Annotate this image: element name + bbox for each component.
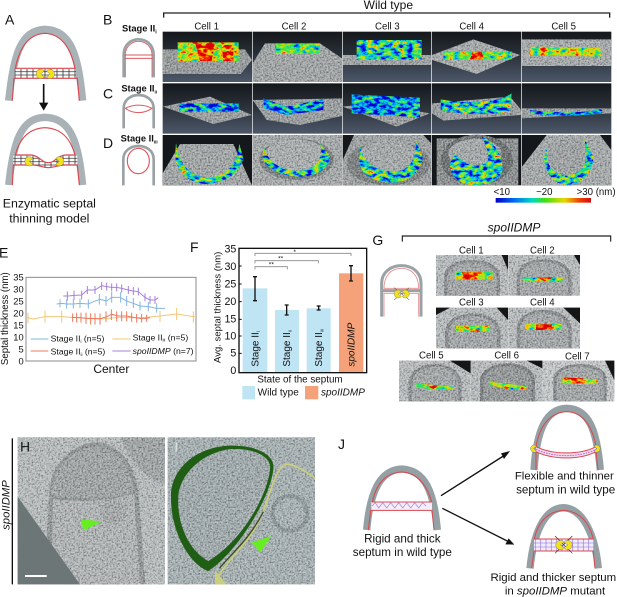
- bar labels: Stage II: [251, 332, 262, 367]
- vertical label spoIIDMP: spoIIDMP: [0, 480, 12, 530]
- significance brackets: **: [269, 262, 274, 269]
- panel letter A: A: [5, 12, 15, 28]
- significance brackets: **: [278, 256, 284, 263]
- legend: spoIIDMP (n=7): [133, 346, 194, 356]
- diagram: cell with thick septum: [9, 29, 83, 101]
- diagram: flexible thinner septum: septum in wild type: [516, 483, 615, 496]
- bars: [243, 273, 363, 373]
- bar labels: Stage II: [314, 332, 325, 367]
- caption: thinning model: [9, 211, 89, 225]
- icons: stage schematics: [123, 39, 154, 185]
- error bars: [253, 266, 353, 315]
- axes: Avg. septal thickness (nm): [212, 252, 223, 363]
- panel B, C, D header: wild type bracket: [164, 0, 610, 33]
- bar labels: i: [256, 331, 262, 332]
- legend: (n=5): [165, 332, 188, 342]
- diagram: rigid thicker septum in mutant: [490, 508, 616, 597]
- axes and ticks: 30: [13, 285, 24, 295]
- series: stage IIi: [57, 292, 165, 313]
- panel A: enzymatic septal thinning model: [3, 12, 96, 225]
- panel I: segmented tomogram: I: [174, 441, 178, 455]
- panel B: heat-mapped septa, stage IIi: [163, 32, 611, 82]
- legend: (n=5): [81, 334, 104, 344]
- axes and ticks: 15: [13, 321, 24, 331]
- panel letters B C D and stage labels: Stage II: [121, 83, 155, 93]
- series: stage IIii: [72, 309, 150, 325]
- axes and ticks: 20: [13, 309, 24, 319]
- significance brackets: [255, 249, 351, 269]
- arrow: thinning progression: [39, 84, 48, 111]
- axes: 25: [224, 278, 236, 290]
- axes: 30: [224, 261, 236, 273]
- panel H: tomogram slice: H: [20, 439, 30, 455]
- color scale legend: ~20: [536, 187, 553, 198]
- panel letters B C D and stage labels: C: [103, 85, 113, 101]
- cell labels: Cell 2: [530, 246, 555, 257]
- axes and ticks: 0: [18, 356, 24, 366]
- series: spoIIDMP: [63, 282, 158, 304]
- cell labels: Cell 5: [419, 351, 444, 362]
- panel B, C, D header: wild type bracket: Cell 2: [282, 22, 306, 33]
- significance brackets: *: [293, 249, 296, 256]
- diagram: rigid thick septum: [353, 469, 452, 559]
- legend: i: [81, 339, 82, 344]
- color scale legend: >30 (nm): [577, 187, 616, 198]
- panel letters B C D and stage labels: i: [155, 29, 157, 35]
- tomogram tiles: [399, 255, 614, 401]
- diagram: flexible thinner septum: Flexible and thinner: [515, 471, 614, 483]
- axes: 0: [230, 365, 236, 377]
- panel letters B C D and stage labels: D: [103, 135, 113, 151]
- diagram: rigid thick septum: septum in wild type: [353, 546, 452, 559]
- legend: Stage II: [51, 347, 81, 357]
- legend: spoIIDMP: [321, 388, 365, 399]
- axes: 5: [230, 348, 236, 360]
- panel letter G: G: [372, 232, 383, 248]
- panel H: tomogram slice: [18, 437, 165, 584]
- title bracket: [402, 221, 611, 242]
- axes and ticks: 35: [13, 273, 24, 283]
- arrow: to mutant septum: [442, 508, 514, 545]
- axes and ticks: [0, 272, 196, 376]
- cell labels: [419, 246, 590, 362]
- panel J: model of septum rigidity: [338, 408, 616, 597]
- legend: iii: [163, 338, 165, 343]
- bar labels: iii: [319, 329, 324, 332]
- legend: ii: [81, 352, 82, 357]
- color scale legend: [494, 187, 616, 203]
- panel letter F: F: [190, 239, 199, 255]
- panel B, C, D header: wild type bracket: Cell 4: [459, 22, 485, 33]
- cell labels: Cell 4: [530, 298, 555, 309]
- axes and ticks: 25: [13, 297, 24, 307]
- legend: Wild type: [258, 388, 299, 399]
- panel B, C, D header: wild type bracket: Cell 1: [194, 22, 219, 33]
- axes: [212, 244, 367, 385]
- panel letter J: J: [338, 436, 345, 452]
- panel letters B C D and stage labels: iii: [154, 139, 158, 144]
- axes: 15: [224, 314, 236, 326]
- panel letters B C D and stage labels: B: [103, 12, 112, 28]
- axes: 35: [224, 244, 236, 256]
- diagram: rigid thicker septum in mutant: in spoIIDMP mutant: [505, 585, 606, 597]
- cell labels: Cell 7: [565, 351, 590, 362]
- legend: (n=5): [82, 347, 105, 357]
- caption: Enzymatic septal: [3, 196, 96, 210]
- axes and ticks: Center: [93, 362, 129, 376]
- arrowhead: [252, 536, 272, 552]
- panel C: heat-mapped septa, stage IIii: [163, 83, 611, 134]
- panel B, C, D header: wild type bracket: Cell 5: [551, 22, 576, 33]
- axes and ticks: Septal thickness (nm): [0, 272, 11, 365]
- arrowhead: [81, 519, 102, 531]
- panel E: septal thickness line chart: [0, 244, 196, 376]
- diagram: rigid thick septum: Rigid and thick: [364, 532, 441, 545]
- panel I: segmented tomogram: [168, 437, 315, 584]
- title bracket: spoIIDMP: [488, 221, 540, 235]
- panel G: spoIIDMP cells: [372, 221, 614, 401]
- cell labels: Cell 6: [494, 351, 519, 362]
- bar labels: Stage II: [282, 332, 293, 367]
- legend: Stage II: [133, 332, 163, 342]
- legend: [242, 386, 365, 399]
- panel letters B C D and stage labels: [103, 12, 158, 151]
- legend: [31, 332, 194, 357]
- bar labels: spoIIDMP: [347, 322, 358, 367]
- panel F: average septal thickness bar chart: [190, 239, 367, 399]
- legend: Stage II: [51, 334, 81, 344]
- axes and ticks: 5: [18, 345, 24, 355]
- series: stage IIiii: [26, 308, 196, 323]
- icon: cell with blocked septum: [382, 266, 421, 317]
- color scale legend: <10: [494, 187, 510, 198]
- bar labels: [251, 322, 358, 367]
- panel letters B C D and stage labels: Stage II: [122, 23, 155, 33]
- panel B, C, D header: wild type bracket: Cell 3: [375, 22, 400, 33]
- diagram: rigid thicker septum in mutant: Rigid and thicker septum: [490, 572, 616, 584]
- cell labels: Cell 3: [459, 298, 484, 309]
- cell labels: Cell 1: [459, 246, 484, 257]
- heat-mapped septa: [416, 272, 597, 390]
- diagram: cell with thinned septum: [9, 117, 83, 185]
- panels H and I: tomogram slices: [0, 437, 315, 584]
- panel letters B C D and stage labels: Stage II: [121, 133, 154, 143]
- axes: 10: [224, 330, 236, 342]
- bar labels: ii: [287, 330, 292, 332]
- dark tile corners: [436, 255, 614, 380]
- axes: State of the septum: [257, 374, 343, 385]
- axes and ticks: 10: [13, 333, 24, 343]
- panel D: heat-mapped septa, stage IIiii: [163, 135, 611, 185]
- axes: 20: [224, 296, 236, 308]
- panel letters B C D and stage labels: ii: [155, 89, 157, 94]
- diagram: flexible thinner septum: [515, 408, 615, 496]
- arrow: to flexible septum: [441, 451, 510, 496]
